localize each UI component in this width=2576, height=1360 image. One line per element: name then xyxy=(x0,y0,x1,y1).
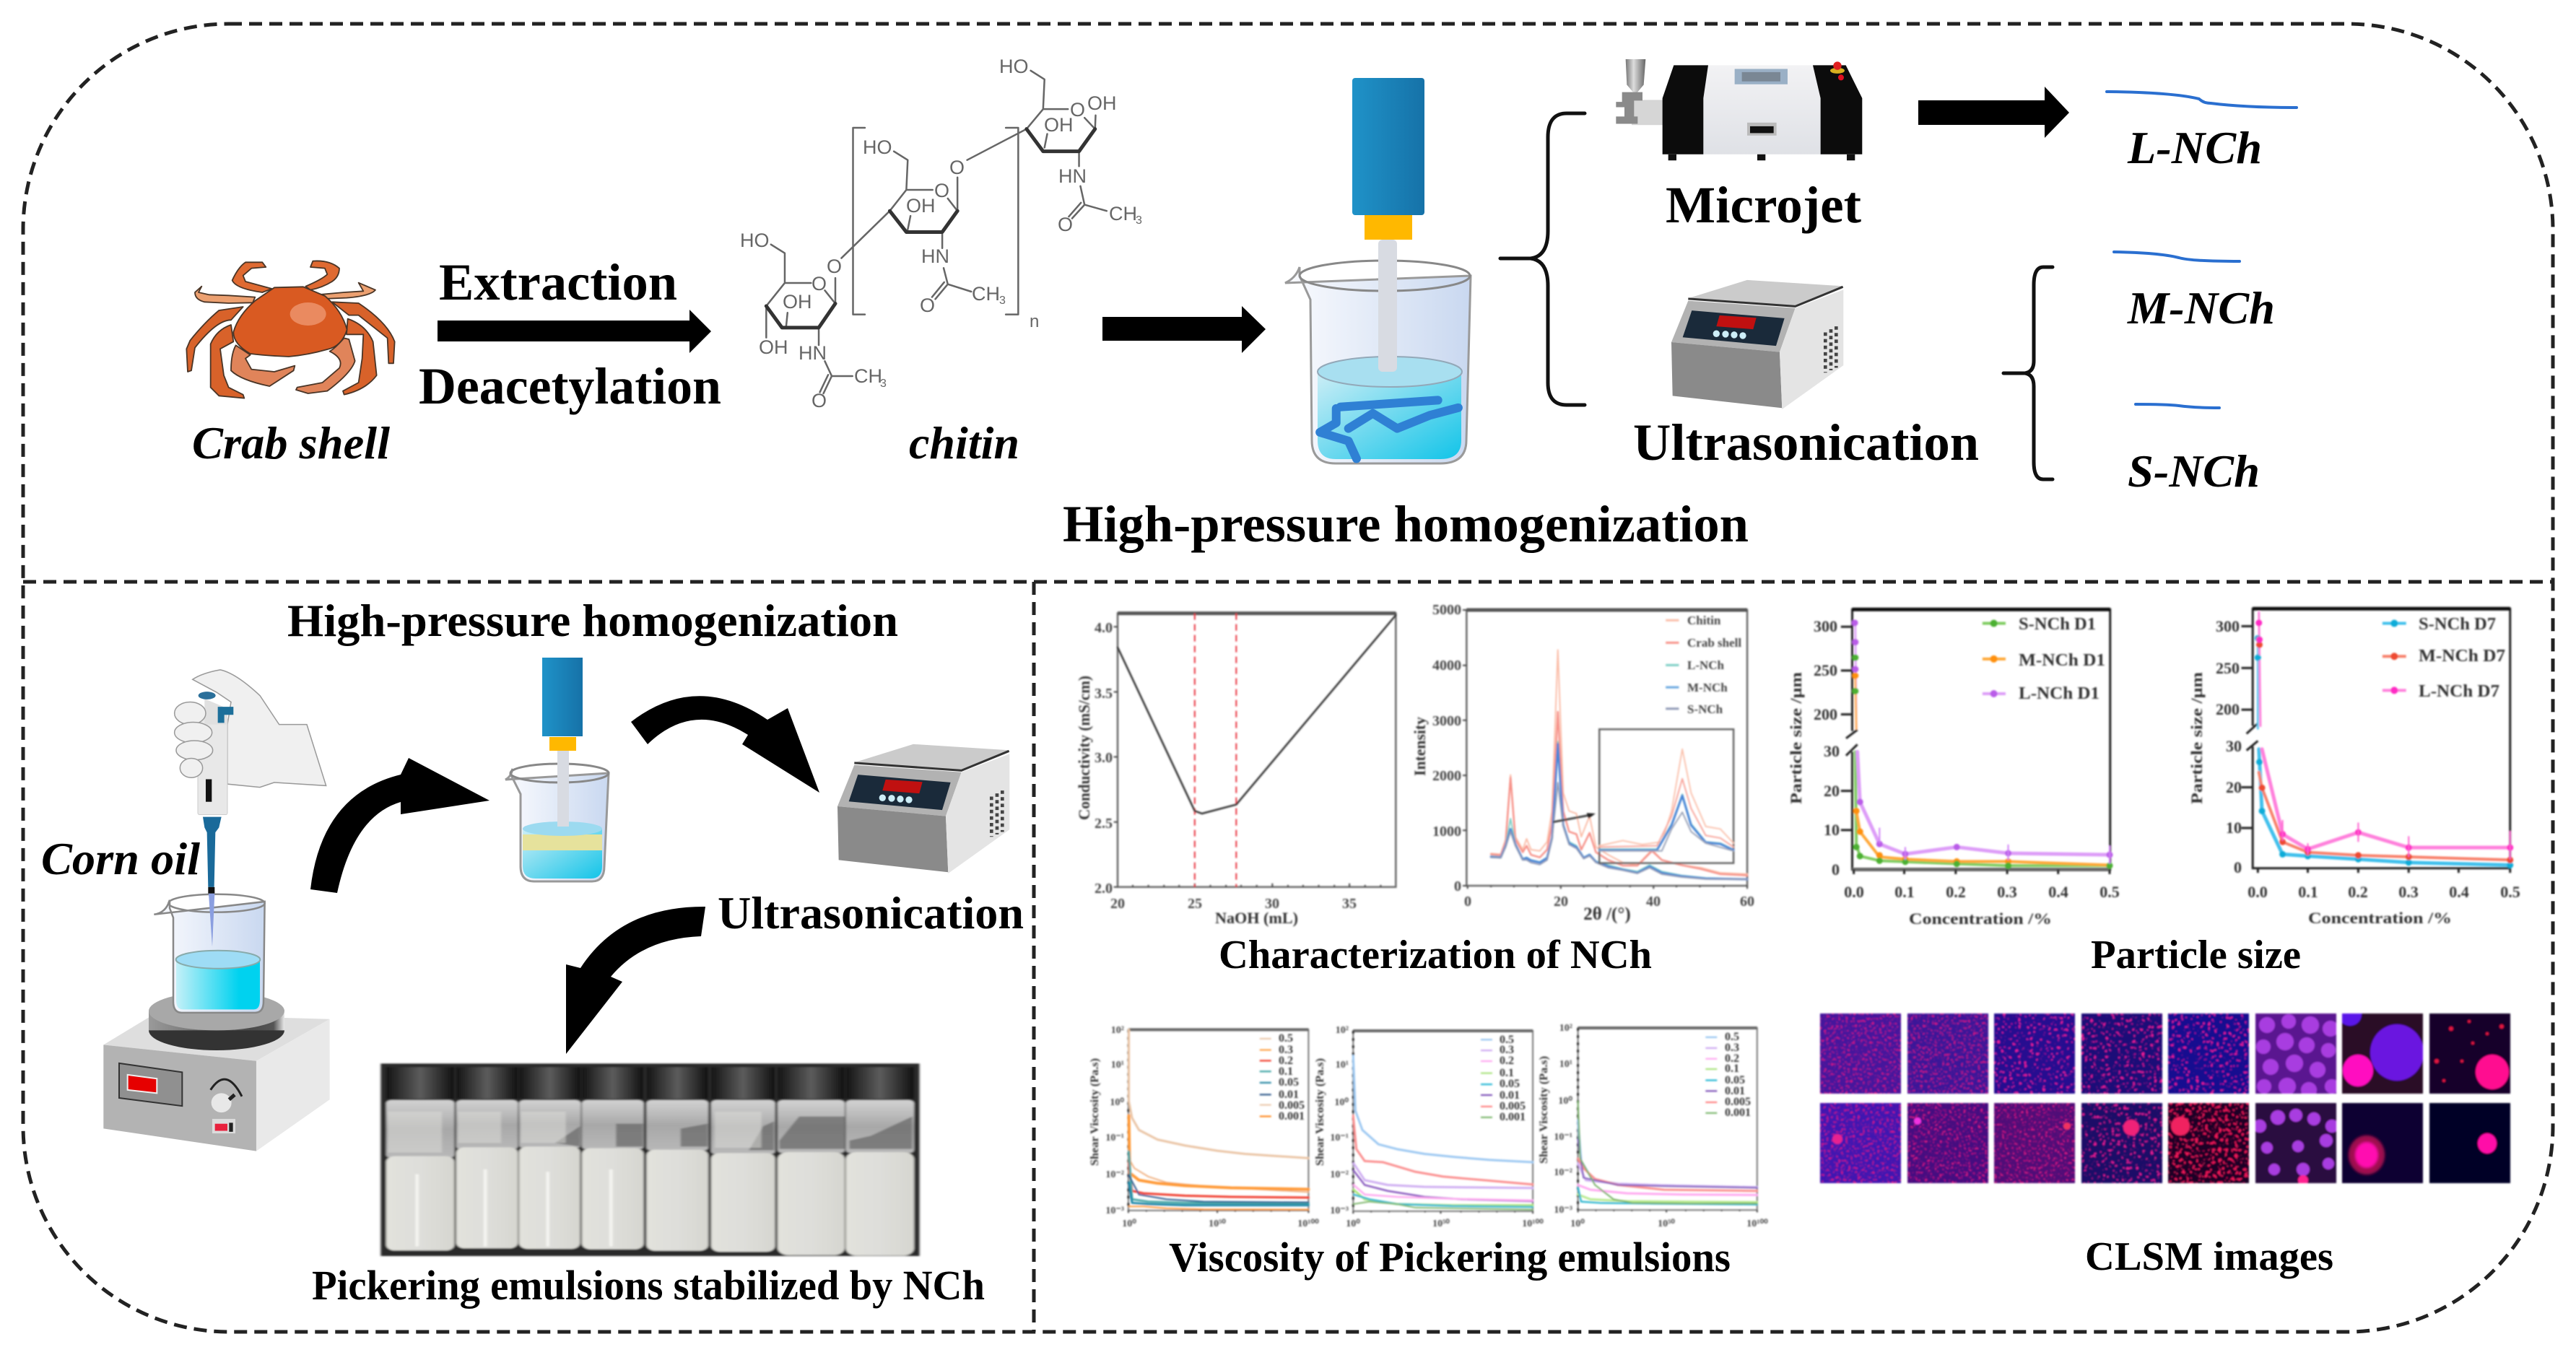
chart: conductivity titration: 2.0 xyxy=(1095,881,1113,897)
label: ultrasonication: Ultrasonication xyxy=(1633,414,1979,471)
chitin structure: HO xyxy=(740,230,770,251)
label: S-NCh: S-NCh xyxy=(2128,445,2260,497)
chart: viscosity L-NCh: 0.2 xyxy=(1279,1055,1293,1067)
chitin structure: HN xyxy=(799,342,827,364)
chitin structure: CH xyxy=(972,283,1000,305)
arrow: curved to ultrasonicator xyxy=(631,696,819,793)
CLSM image grid xyxy=(1820,1003,2510,1185)
chart: viscosity S-NCh: 10⁵⁰ xyxy=(1658,1219,1675,1229)
chart: particle size day 1: 0.0 xyxy=(1844,883,1864,901)
fibre: L-NCh xyxy=(2107,92,2297,108)
chart: XRD patterns xyxy=(1411,602,1754,924)
chart: particle size day 1: 300 xyxy=(1814,617,1837,635)
chart: viscosity L-NCh xyxy=(1089,1025,1319,1229)
chart: viscosity M-NCh: 0.005 xyxy=(1500,1100,1526,1112)
chart: particle size day 1: 200 xyxy=(1814,705,1837,723)
chart: viscosity S-NCh: 0.3 xyxy=(1725,1042,1739,1054)
chart: viscosity M-NCh: 0.3 xyxy=(1500,1044,1514,1056)
chart: particle size day 7: 0.1 xyxy=(2298,883,2318,901)
chart: viscosity S-NCh: Shear Viscosity (Pa.s) xyxy=(1538,1056,1550,1164)
chart: XRD patterns: 0 xyxy=(1454,879,1461,894)
chart: XRD patterns: Crab shell xyxy=(1687,636,1741,650)
chart: particle size day 7: 300 xyxy=(2216,617,2240,635)
chart: XRD patterns: 2000 xyxy=(1432,768,1461,784)
chart: viscosity S-NCh: 0.001 xyxy=(1725,1107,1751,1119)
heading: CLSM images: CLSM images xyxy=(2085,1234,2333,1279)
arrow: extraction xyxy=(438,310,711,353)
panel: characterization results xyxy=(1075,602,2520,1281)
label: corn oil: Corn oil xyxy=(41,833,200,884)
chart: XRD patterns: Intensity xyxy=(1411,717,1429,776)
label: ultrasonication: Ultrasonication xyxy=(718,887,1024,938)
chart: viscosity L-NCh: 10⁰ xyxy=(1122,1219,1136,1229)
chart: particle size day 7: 10 xyxy=(2226,819,2242,837)
chart: particle size day 1: S-NCh D1 xyxy=(2019,615,2096,634)
chart: viscosity S-NCh: 10⁻¹ xyxy=(1554,1132,1572,1143)
chart: viscosity S-NCh: 0.2 xyxy=(1725,1052,1739,1065)
chart: viscosity M-NCh: 10⁰ xyxy=(1346,1219,1360,1229)
caption: pickering emulsions: Pickering emulsions stabilized by NCh xyxy=(312,1262,985,1309)
heading: viscosity of pickering emulsions: Viscosity of Pickering emulsions xyxy=(1169,1234,1731,1281)
photo: eight emulsion vials xyxy=(380,1063,920,1256)
chart: viscosity M-NCh: 0.001 xyxy=(1500,1111,1526,1123)
chitin structure: OH xyxy=(1087,92,1116,114)
chart: particle size day 7: S-NCh D7 xyxy=(2419,615,2496,634)
bracket: NCh sizes xyxy=(2003,267,2053,479)
chart: conductivity titration: Conductivity (mS/cm) xyxy=(1075,676,1093,820)
heading: high-pressure homogenization: High-pressure homogenization xyxy=(1063,495,1749,553)
text: deacetylation: Deacetylation xyxy=(419,357,721,415)
chart: viscosity L-NCh: 0.005 xyxy=(1279,1099,1305,1112)
chart: conductivity titration: 20 xyxy=(1110,896,1125,912)
chitin structure: HN xyxy=(921,245,949,267)
bracket: microjet and ultrasonication xyxy=(1500,113,1585,405)
icon: homogenizer in beaker xyxy=(1285,78,1471,463)
chart: viscosity M-NCh: 10⁰ xyxy=(1334,1097,1349,1108)
label: microjet: Microjet xyxy=(1666,176,1861,234)
icon: small homogenizer in beaker xyxy=(505,658,609,881)
chart: particle size day 1: 0.2 xyxy=(1946,883,1966,901)
chart: conductivity titration: 3.5 xyxy=(1095,686,1113,702)
chitin structure: HN xyxy=(1058,165,1087,187)
chart: viscosity M-NCh: 0.2 xyxy=(1500,1055,1514,1067)
chitin structure: 3 xyxy=(999,295,1006,307)
chart: particle size day 1: 20 xyxy=(1824,782,1840,800)
chart: conductivity titration xyxy=(1075,614,1396,927)
arrow: curved to vials xyxy=(566,907,705,1054)
chart: viscosity S-NCh: 10¹⁰⁰ xyxy=(1746,1219,1768,1229)
chart: particle size day 1: 10 xyxy=(1824,821,1840,839)
panel: emulsion preparation xyxy=(41,595,1024,1309)
chart: particle size day 7: 0.3 xyxy=(2398,883,2419,901)
chart: conductivity titration: NaOH (mL) xyxy=(1215,909,1298,927)
chart: particle size day 7: 0 xyxy=(2234,858,2242,876)
icon: crab xyxy=(186,261,395,398)
chart: conductivity titration: 4.0 xyxy=(1095,620,1113,636)
chart: particle size day 1: 0 xyxy=(1832,860,1840,879)
chart: conductivity titration: 2.5 xyxy=(1095,816,1113,832)
chitin structure: 3 xyxy=(1136,214,1142,227)
chitin structure: O xyxy=(934,180,949,201)
chart: viscosity L-NCh: 10¹ xyxy=(1111,1060,1124,1071)
chart: viscosity L-NCh: 0.01 xyxy=(1279,1089,1299,1101)
chart: viscosity L-NCh: 10² xyxy=(1111,1025,1124,1036)
chitin structure: CH xyxy=(854,365,882,387)
label: crab shell: Crab shell xyxy=(192,417,390,468)
chitin structure: OH xyxy=(906,195,936,217)
chitin structure: 3 xyxy=(880,378,887,390)
chart: viscosity S-NCh: 0.005 xyxy=(1725,1096,1751,1108)
chart: viscosity S-NCh: 10⁰ xyxy=(1558,1096,1572,1107)
text: extraction: Extraction xyxy=(439,253,677,311)
label: chitin: chitin xyxy=(909,417,1019,468)
chart: viscosity L-NCh: 10⁻² xyxy=(1105,1169,1124,1180)
chart: XRD patterns: M-NCh xyxy=(1687,681,1728,694)
chart: viscosity S-NCh: 10⁻³ xyxy=(1554,1205,1572,1216)
chart: viscosity L-NCh: 10⁰ xyxy=(1110,1097,1124,1108)
label: L-NCh: L-NCh xyxy=(2127,122,2262,173)
chart: viscosity L-NCh: 10⁻¹ xyxy=(1105,1133,1124,1143)
chart: XRD patterns: 1000 xyxy=(1432,824,1461,840)
chart: particle size day 1 xyxy=(1787,609,2120,928)
chart: particle size day 1: 0.4 xyxy=(2048,883,2068,901)
chart: particle size day 7: 200 xyxy=(2216,700,2240,718)
icon: magnetic stirrer with beaker and hand-held pipette xyxy=(103,670,330,1151)
chart: viscosity L-NCh: 10⁻³ xyxy=(1105,1206,1124,1216)
chart: particle size day 7: Particle size /μm xyxy=(2188,672,2206,804)
chart: XRD patterns: S-NCh xyxy=(1687,702,1723,716)
chitin structure: HO xyxy=(999,56,1028,77)
chart: XRD patterns: 3000 xyxy=(1432,713,1461,729)
chitin structure xyxy=(740,56,1142,411)
chart: viscosity M-NCh: 10⁻¹ xyxy=(1330,1133,1349,1143)
panel: nanochitin preparation xyxy=(186,56,2297,553)
chitin structure: O xyxy=(827,256,842,277)
chart: viscosity M-NCh: 10² xyxy=(1336,1025,1349,1036)
chart: conductivity titration: 35 xyxy=(1342,896,1357,912)
chitin structure: OH xyxy=(759,336,788,358)
chart: particle size day 1: L-NCh D1 xyxy=(2019,684,2099,703)
chart: particle size day 7: 30 xyxy=(2226,737,2242,755)
chart: viscosity L-NCh: 10¹⁰⁰ xyxy=(1297,1219,1319,1229)
arrow: microjet to L-NCh xyxy=(1918,87,2069,138)
chart: XRD patterns: 2θ /(°) xyxy=(1583,905,1631,924)
arrow: to homogenizer xyxy=(1102,306,1266,353)
chitin structure: n xyxy=(1030,312,1039,331)
chart: viscosity S-NCh: 0.1 xyxy=(1725,1063,1739,1075)
chart: particle size day 7: 0.0 xyxy=(2248,883,2268,901)
arrow: curved to homogenizer xyxy=(310,758,489,893)
chart: viscosity M-NCh: 10⁻³ xyxy=(1330,1206,1349,1216)
fibre: M-NCh xyxy=(2114,252,2240,261)
chart: conductivity titration: 25 xyxy=(1188,896,1202,912)
chart: XRD patterns: 60 xyxy=(1740,894,1754,910)
chart: XRD patterns: 5000 xyxy=(1432,602,1461,618)
icon: small ultrasonicator xyxy=(837,744,1009,873)
chart: viscosity S-NCh xyxy=(1538,1023,1768,1229)
chart: XRD patterns: L-NCh xyxy=(1687,658,1725,672)
chart: particle size day 7: 0.2 xyxy=(2348,883,2368,901)
chart: viscosity S-NCh: 0.5 xyxy=(1725,1031,1739,1043)
chart: particle size day 7: Concentration /% xyxy=(2308,909,2452,927)
chart: viscosity M-NCh: 10¹⁰⁰ xyxy=(1522,1219,1544,1229)
chart: XRD patterns: Chitin xyxy=(1687,614,1721,627)
chart: particle size day 7 xyxy=(2188,609,2520,927)
chitin structure: O xyxy=(920,295,935,316)
chart: viscosity L-NCh: 0.05 xyxy=(1279,1076,1299,1089)
chart: viscosity M-NCh: 10⁵⁰ xyxy=(1432,1219,1450,1229)
chitin structure: O xyxy=(811,273,827,295)
chart: viscosity L-NCh: 10⁵⁰ xyxy=(1209,1219,1226,1229)
chart: conductivity titration: 30 xyxy=(1265,896,1279,912)
chart: viscosity S-NCh: 10² xyxy=(1559,1023,1572,1034)
chart: particle size day 7: 0.4 xyxy=(2449,883,2469,901)
chitin structure: OH xyxy=(783,291,811,313)
icon: microjet machine xyxy=(1616,59,1862,160)
chitin structure: O xyxy=(949,157,965,178)
chart: XRD patterns: 0 xyxy=(1464,894,1471,910)
chart: viscosity M-NCh: 0.5 xyxy=(1500,1034,1514,1046)
chitin structure: OH xyxy=(1044,114,1073,136)
heading: high-pressure homogenization: High-pressure homogenization xyxy=(287,595,898,646)
chart: particle size day 7: 0.5 xyxy=(2500,883,2520,901)
chart: viscosity M-NCh: 10⁻² xyxy=(1330,1169,1349,1180)
chart: viscosity S-NCh: 0.01 xyxy=(1725,1085,1745,1097)
chitin structure: O xyxy=(1058,214,1073,235)
heading: particle size: Particle size xyxy=(2091,933,2301,977)
chart: viscosity S-NCh: 10¹ xyxy=(1559,1059,1572,1070)
chart: particle size day 1: M-NCh D1 xyxy=(2019,651,2105,670)
fibre: S-NCh xyxy=(2136,404,2219,408)
chart: viscosity L-NCh: 0.1 xyxy=(1279,1065,1293,1078)
chart: XRD patterns: 20 xyxy=(1554,894,1568,910)
chart: particle size day 1: Particle size /μm xyxy=(1787,672,1805,804)
chart: particle size day 1: 0.5 xyxy=(2099,883,2120,901)
chart: viscosity M-NCh: 0.1 xyxy=(1500,1067,1514,1079)
label: M-NCh: M-NCh xyxy=(2127,282,2275,334)
chart: XRD patterns: 4000 xyxy=(1432,658,1461,674)
chitin structure: HO xyxy=(863,136,892,158)
chart: viscosity L-NCh: 0.001 xyxy=(1279,1110,1305,1123)
chart: particle size day 1: 0.3 xyxy=(1997,883,2017,901)
heading: characterization of NCh: Characterization of NCh xyxy=(1219,933,1652,977)
chart: particle size day 1: 0.1 xyxy=(1894,883,1915,901)
chart: viscosity M-NCh xyxy=(1314,1025,1544,1229)
chart: particle size day 1: Concentration /% xyxy=(1909,910,2052,928)
chart: viscosity L-NCh: 0.5 xyxy=(1279,1032,1293,1045)
chart: particle size day 7: 20 xyxy=(2226,778,2242,796)
chart: conductivity titration: 3.0 xyxy=(1095,750,1113,766)
chart: viscosity M-NCh: 0.01 xyxy=(1500,1089,1520,1102)
chart: viscosity L-NCh: 0.3 xyxy=(1279,1044,1293,1056)
chart: particle size day 1: 30 xyxy=(1824,742,1840,760)
chart: particle size day 7: L-NCh D7 xyxy=(2419,682,2499,701)
chitin structure: CH xyxy=(1109,203,1137,225)
chart: particle size day 7: 250 xyxy=(2216,659,2240,677)
chart: particle size day 1: 250 xyxy=(1814,661,1837,679)
chart: viscosity S-NCh: 10⁻² xyxy=(1554,1167,1572,1178)
chart: viscosity S-NCh: 10⁰ xyxy=(1570,1219,1585,1229)
chitin structure: O xyxy=(1070,99,1085,121)
chitin structure: O xyxy=(811,390,827,411)
chart: particle size day 7: M-NCh D7 xyxy=(2419,647,2505,666)
chart: viscosity M-NCh: 10¹ xyxy=(1336,1060,1349,1071)
chart: viscosity S-NCh: 0.05 xyxy=(1725,1074,1745,1086)
chart: viscosity M-NCh: Shear Viscosity (Pa.s) xyxy=(1314,1058,1326,1166)
chart: viscosity M-NCh: 0.05 xyxy=(1500,1078,1520,1090)
icon: ultrasonicator xyxy=(1671,280,1843,409)
chart: viscosity L-NCh: Shear Viscosity (Pa.s) xyxy=(1089,1058,1101,1166)
chart: XRD patterns: 40 xyxy=(1646,894,1661,910)
